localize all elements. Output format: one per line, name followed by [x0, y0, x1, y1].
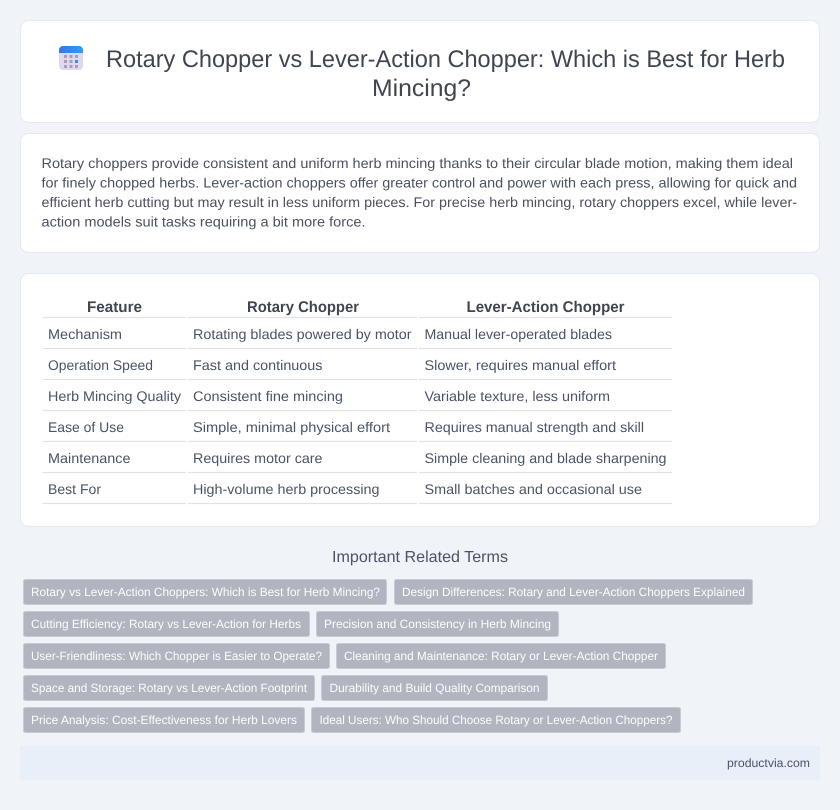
text block: summary: efficient herb cutting but may result in less uniform pieces. For precise herb mincing, rotary choppers excel, while lever-: [42, 194, 797, 210]
tag: Cutting Efficiency: Rotary vs Lever-Action for Herbs: [31, 617, 301, 631]
table row: ease of use: Requires manual strength and skill: [424, 419, 644, 435]
table row: best for: [48, 481, 642, 497]
tag: Precision and Consistency in Herb Mincing: [324, 617, 551, 631]
heading: important related terms: Important Related Terms: [332, 549, 508, 566]
table header: Rotary Chopper: [247, 299, 359, 316]
table row: mechanism: Mechanism: [48, 326, 122, 342]
related term tags: [24, 580, 752, 732]
panel: title header: [20, 20, 820, 122]
icon: calendar: [59, 46, 83, 70]
table header: Lever-Action Chopper: [466, 299, 624, 316]
table header: Feature: [87, 299, 142, 316]
tag: Price Analysis: Cost-Effectiveness for Herb Lovers: [31, 713, 297, 727]
tag: [322, 676, 548, 700]
table row: best for: Best For: [48, 481, 101, 497]
table row: herb mincing quality: [48, 388, 610, 404]
text block: summary: for finely chopped herbs. Lever-action choppers offer greater control and power with each press, allowing for quick and: [42, 174, 797, 190]
table row: ease of use: Simple, minimal physical effort: [193, 419, 390, 435]
title: [106, 46, 785, 102]
table row: ease of use: [48, 419, 644, 435]
table row: operation speed: Fast and continuous: [193, 357, 322, 373]
table row: maintenance: Simple cleaning and blade sharpening: [424, 450, 666, 466]
tag: [24, 612, 310, 636]
table row: operation speed: Operation Speed: [48, 357, 153, 373]
table row: herb mincing quality: Consistent fine mincing: [193, 388, 343, 404]
table row: herb mincing quality: Variable texture, less uniform: [424, 388, 610, 404]
table header: [87, 299, 624, 316]
tag: [24, 676, 314, 700]
tag: Rotary vs Lever-Action Choppers: Which is Best for Herb Mincing?: [31, 585, 380, 599]
title: Rotary Chopper vs Lever-Action Chopper: Which is Best for Herb: [106, 46, 785, 73]
tag: Ideal Users: Who Should Choose Rotary or Lever-Action Choppers?: [320, 713, 673, 727]
table row: operation speed: Slower, requires manual effort: [424, 357, 616, 373]
text block: summary: [42, 155, 797, 230]
tag: [24, 644, 330, 668]
table row: mechanism: [48, 326, 612, 342]
panel: summary text: [20, 134, 820, 252]
table row: maintenance: [48, 450, 666, 466]
tag: [24, 708, 304, 732]
tag: [24, 580, 386, 604]
table row: operation speed: [48, 357, 616, 373]
tag: [312, 708, 680, 732]
tag: [316, 612, 558, 636]
table row: mechanism: Rotating blades powered by motor: [193, 326, 412, 342]
table row: best for: High-volume herb processing: [193, 481, 380, 497]
tag: Design Differences: Rotary and Lever-Action Choppers Explained: [402, 585, 745, 599]
table row: ease of use: Ease of Use: [48, 419, 124, 435]
footer: [20, 746, 820, 780]
table row: maintenance: Requires motor care: [193, 450, 323, 466]
table row: best for: Small batches and occasional use: [424, 481, 642, 497]
title: Mincing?: [372, 75, 471, 102]
tag: Space and Storage: Rotary vs Lever-Action Footprint: [31, 681, 308, 695]
footer source: productvia.com: [727, 756, 810, 770]
text block: summary: Rotary choppers provide consistent and uniform herb mincing thanks to their circular blade motion, making them ideal: [42, 155, 793, 171]
panel: comparison table: [20, 274, 820, 526]
tag: [394, 580, 752, 604]
table row: maintenance: Maintenance: [48, 450, 131, 466]
text block: summary: action models suit tasks requiring a bit more force.: [42, 214, 366, 230]
tag: User-Friendliness: Which Chopper is Easier to Operate?: [31, 649, 322, 663]
tag: [336, 644, 666, 668]
table row: herb mincing quality: Herb Mincing Quality: [48, 388, 181, 404]
table row: mechanism: Manual lever-operated blades: [424, 326, 612, 342]
tag: Cleaning and Maintenance: Rotary or Lever-Action Chopper: [344, 649, 658, 663]
tag: Durability and Build Quality Comparison: [330, 681, 540, 695]
